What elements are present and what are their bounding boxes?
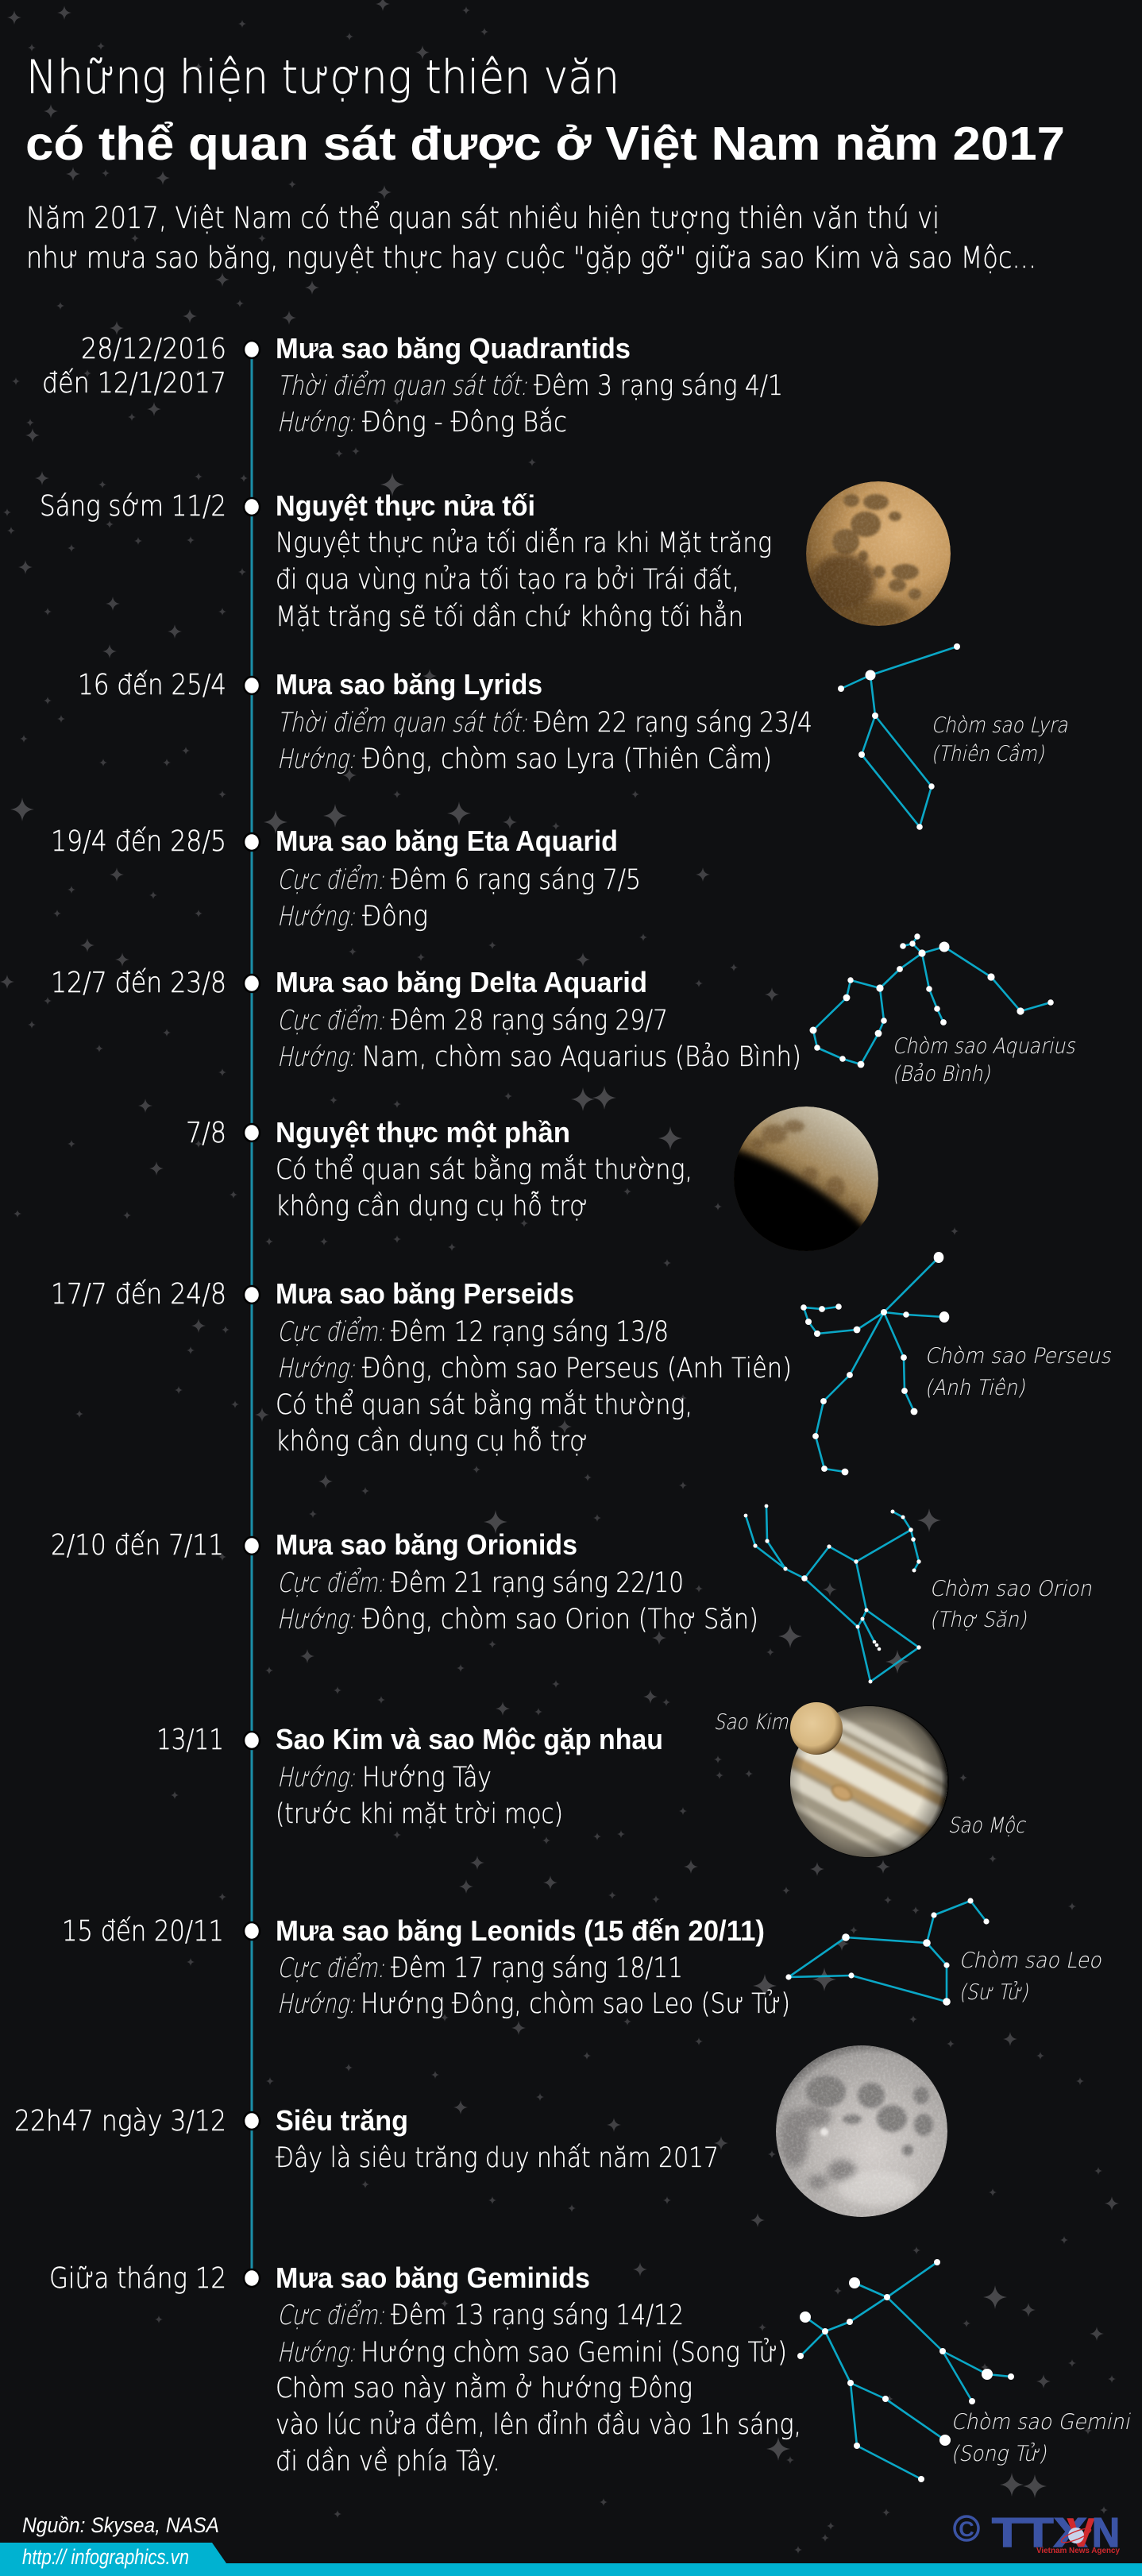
- footer band: [0, 2543, 1142, 2576]
- event: Leonids: Hướng:: [276, 1988, 360, 2020]
- event: Lyrids: Đông, chòm sao Lyra (Thiên Cầm): [362, 743, 772, 775]
- event: penumbral eclipse: Sáng sớm 11/2: [40, 490, 226, 523]
- event: Quadrantids: Đêm 3 rạng sáng 4/1: [534, 370, 783, 402]
- event: Venus and Jupiter conjunction: (trước khi mặt trời mọc): [276, 1798, 563, 1830]
- event: Perseids: Có thể quan sát bằng mắt thường,: [276, 1388, 693, 1421]
- event: Venus and Jupiter conjunction: Hướng Tây: [362, 1762, 492, 1794]
- event: Quadrantids: Mưa sao băng Quadrantids: [276, 332, 631, 365]
- event: Geminids: Chòm sao này nằm ở hướng Đông: [276, 2372, 693, 2404]
- event: penumbral eclipse: Nguyệt thực nửa tối diễn ra khi Mặt trăng: [276, 527, 772, 559]
- event: Orionids: Đông, chòm sao Orion (Thợ Săn): [362, 1604, 758, 1636]
- event: Leonids: Đêm 17 rạng sáng 18/11: [391, 1952, 683, 1984]
- copyright mark: C: [959, 2517, 974, 2541]
- globe: [1060, 2526, 1092, 2545]
- event: Venus and Jupiter conjunction: Sao Kim và sao Mộc gặp nhau: [276, 1723, 663, 1755]
- event: Geminids: Hướng chòm sao Gemini (Song Tử): [361, 2337, 787, 2369]
- event: Perseids: Hướng:: [276, 1353, 360, 1385]
- constellation: Perseus: (Anh Tiên): [924, 1376, 1029, 1400]
- event: Quadrantids: đến 12/1/2017: [42, 367, 226, 400]
- event: Orionids: Đêm 21 rạng sáng 22/10: [391, 1567, 684, 1599]
- event: supermoon: Đây là siêu trăng duy nhất năm 2017: [276, 2142, 719, 2174]
- title: [25, 50, 1065, 170]
- event: Lyrids: [78, 668, 812, 775]
- event: Geminids: Hướng:: [276, 2337, 360, 2369]
- event: Venus and Jupiter conjunction: Hướng:: [276, 1762, 360, 1794]
- constellation: Lyra: [838, 643, 1072, 830]
- event: Geminids: Cực điểm:: [276, 2300, 389, 2331]
- event: Orionids: Mưa sao băng Orionids: [276, 1528, 577, 1561]
- event: Perseids: không cần dụng cụ hỗ trợ: [276, 1426, 588, 1458]
- event: Geminids: [49, 2261, 801, 2478]
- event: Quadrantids: [42, 332, 783, 438]
- event: Delta Aquarid: 12/7 đến 23/8: [51, 967, 226, 999]
- event: Lyrids: Mưa sao băng Lyrids: [276, 668, 542, 701]
- event: Eta Aquarid: Đông: [362, 901, 428, 933]
- intro text: [26, 200, 1036, 275]
- constellation: Leo: (Sư Tử): [958, 1980, 1032, 2005]
- event: partial eclipse: Có thể quan sát bằng mắt thường,: [276, 1153, 693, 1186]
- event: penumbral eclipse: Nguyệt thực nửa tối: [276, 489, 535, 522]
- event: Eta Aquarid: Hướng:: [276, 901, 360, 933]
- event: Quadrantids: Đông - Đông Bắc: [362, 406, 567, 438]
- event: Leonids: Hướng Đông, chòm sao Leo (Sư Tử): [361, 1988, 790, 2020]
- event: Geminids: vào lúc nửa đêm, lên đỉnh đầu vào 1h sáng,: [276, 2409, 801, 2441]
- event: Perseids: 17/7 đến 24/8: [51, 1278, 226, 1311]
- event: partial eclipse: Nguyệt thực một phần: [276, 1116, 570, 1149]
- icon: supermoon: [776, 2045, 947, 2217]
- constellation: Leo: Chòm sao Leo: [958, 1948, 1105, 1973]
- constellation: Perseus: [801, 1252, 1115, 1475]
- event: Lyrids: Hướng:: [276, 743, 360, 775]
- event: Leonids: [62, 1914, 790, 2020]
- event: partial eclipse: 7/8: [186, 1117, 226, 1149]
- event: Delta Aquarid: [51, 966, 801, 1073]
- event: Eta Aquarid: Mưa sao băng Eta Aquarid: [276, 825, 618, 857]
- constellation: Gemini: [797, 2259, 1134, 2482]
- event: Delta Aquarid: Đêm 28 rạng sáng 29/7: [391, 1005, 668, 1037]
- event: Delta Aquarid: Mưa sao băng Delta Aquarid: [276, 966, 647, 998]
- event: Lyrids: Đêm 22 rạng sáng 23/4: [534, 707, 812, 739]
- event: penumbral eclipse: Mặt trăng sẽ tối dần chứ không tối hẳn: [276, 599, 743, 633]
- event: Venus and Jupiter conjunction: 13/11: [156, 1724, 224, 1756]
- intro text: Năm 2017, Việt Nam có thể quan sát nhiều hiện tượng thiên văn thú vị: [26, 200, 939, 235]
- title line 1: Những hiện tượng thiên văn: [26, 50, 619, 104]
- event: penumbral eclipse: đi qua vùng nửa tối tạo ra bởi Trái đất,: [276, 564, 739, 596]
- event: Leonids: 15 đến 20/11: [62, 1915, 224, 1948]
- label: Sao Kim: Sao Kim: [712, 1710, 793, 1735]
- copyright mark: [955, 2516, 978, 2541]
- event: Orionids: Hướng:: [276, 1604, 360, 1636]
- icon: penumbral eclipse moon: [806, 481, 951, 626]
- event: Perseids: Mưa sao băng Perseids: [276, 1277, 574, 1310]
- event: Delta Aquarid: Hướng:: [276, 1041, 360, 1073]
- constellation: Perseus: Chòm sao Perseus: [924, 1344, 1115, 1369]
- event: Geminids: Giữa tháng 12: [49, 2262, 226, 2295]
- constellation: Aquarius: (Bảo Bình): [891, 1062, 994, 1087]
- event: Eta Aquarid: [51, 825, 641, 933]
- event: Lyrids: 16 đến 25/4: [78, 669, 226, 701]
- event: Quadrantids: Hướng:: [276, 407, 360, 438]
- event: Orionids: 2/10 đến 7/11: [51, 1529, 224, 1562]
- event: Orionids: [51, 1528, 758, 1636]
- event: Quadrantids: 28/12/2016: [81, 333, 226, 365]
- event: penumbral eclipse: [40, 489, 772, 633]
- event: Perseids: [51, 1277, 792, 1458]
- constellation: Orion: Chòm sao Orion: [928, 1577, 1096, 1601]
- constellation: Orion: (Thợ Săn): [928, 1608, 1031, 1632]
- V letter: V: [1067, 2510, 1095, 2556]
- event: Delta Aquarid: Nam, chòm sao Aquarius (Bảo Bình): [362, 1041, 801, 1073]
- event: Perseids: Đêm 12 rạng sáng 13/8: [391, 1316, 669, 1348]
- constellation: Leo: [785, 1898, 1105, 2006]
- event: partial eclipse: [186, 1116, 693, 1222]
- agency name: Vietnam News Agency: [1036, 2547, 1120, 2555]
- event: Leonids: Cực điểm:: [276, 1952, 389, 1984]
- constellation: Gemini: (Song Tử): [950, 2442, 1051, 2466]
- logo: TTXVN: [955, 2510, 1120, 2556]
- constellation: Gemini: Chòm sao Gemini: [950, 2410, 1134, 2435]
- N letter: N: [1092, 2510, 1120, 2556]
- constellation: Aquarius: Chòm sao Aquarius: [891, 1034, 1079, 1059]
- event: Venus and Jupiter conjunction: [156, 1723, 663, 1830]
- constellation: Lyra: (Thiên Cầm): [930, 742, 1048, 767]
- event: Lyrids: Thời điểm quan sát tốt:: [276, 707, 532, 739]
- icon: Venus: [790, 1702, 843, 1755]
- title line 2: có thể quan sát được ở Việt Nam năm 2017: [25, 118, 1065, 170]
- event: Eta Aquarid: Cực điểm:: [276, 864, 389, 896]
- TTX letters: TTX: [992, 2510, 1087, 2556]
- event: Perseids: Cực điểm:: [276, 1316, 389, 1348]
- event: supermoon: 22h47 ngày 3/12: [14, 2105, 226, 2138]
- event: Leonids: Mưa sao băng Leonids (15 đến 20/11): [276, 1914, 765, 1947]
- event: Quadrantids: Thời điểm quan sát tốt:: [276, 370, 532, 402]
- timeline dots: [244, 341, 260, 2287]
- event: supermoon: [14, 2104, 719, 2174]
- event: Perseids: Đông, chòm sao Perseus (Anh Tiên): [362, 1353, 792, 1385]
- constellation: Orion: [744, 1504, 1096, 1684]
- source text: Nguồn: Skysea, NASA: [22, 2513, 219, 2537]
- event: Delta Aquarid: Cực điểm:: [276, 1005, 389, 1037]
- icon: Jupiter: [790, 1705, 949, 1858]
- event: Geminids: đi dần về phía Tây.: [276, 2446, 500, 2478]
- event: Eta Aquarid: Đêm 6 rạng sáng 7/5: [391, 864, 641, 896]
- constellation: Aquarius: [810, 933, 1079, 1087]
- icon: partially eclipsed moon: [734, 1106, 878, 1251]
- website url: http:// infographics.vn: [22, 2545, 189, 2569]
- event: Geminids: Mưa sao băng Geminids: [276, 2261, 590, 2294]
- event: partial eclipse: không cần dụng cụ hỗ trợ: [276, 1191, 588, 1222]
- constellation: Lyra: Chòm sao Lyra: [930, 713, 1072, 738]
- event: Orionids: Cực điểm:: [276, 1567, 389, 1599]
- event: supermoon: Siêu trăng: [276, 2104, 408, 2137]
- label: Sao Mộc: Sao Mộc: [947, 1813, 1029, 1838]
- timeline line: [251, 350, 253, 2278]
- event: Geminids: Đêm 13 rạng sáng 14/12: [391, 2300, 684, 2331]
- event: Eta Aquarid: 19/4 đến 28/5: [51, 825, 226, 858]
